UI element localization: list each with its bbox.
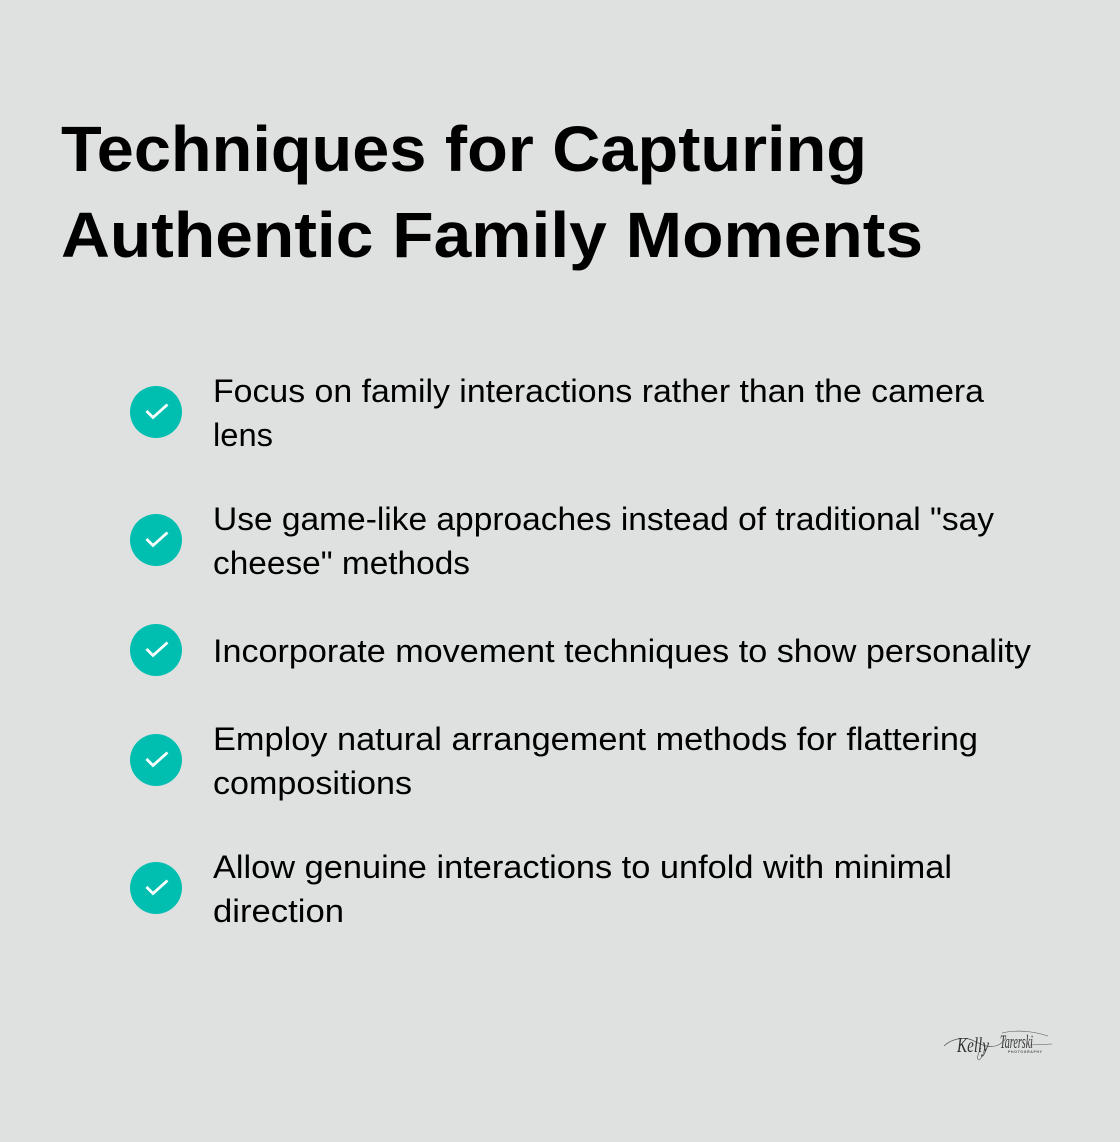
- item 3: Incorporate movement techniques to show personality: [213, 633, 1031, 669]
- item 1: Focus on family interactions rather than the camera: [213, 373, 984, 409]
- title: [61, 113, 923, 271]
- item 5: Allow genuine interactions to unfold with minimal: [213, 849, 952, 885]
- item 5: [130, 849, 952, 929]
- item 2: [130, 501, 994, 581]
- item 1: [130, 373, 984, 453]
- checklist: [130, 373, 1031, 929]
- item 4: [130, 721, 978, 801]
- item 2: cheese" methods: [213, 545, 470, 581]
- logo: signature: Kelly: [956, 1033, 989, 1057]
- logo: signature: [944, 1031, 1052, 1060]
- item 5: direction: [213, 893, 344, 929]
- item 4: Employ natural arrangement methods for flattering: [213, 721, 978, 757]
- logo: signature: PHOTOGRAPHY: [1008, 1050, 1043, 1054]
- title: Authentic Family Moments: [61, 199, 923, 271]
- item 1: lens: [213, 417, 273, 453]
- item 3: [130, 624, 1031, 676]
- item 2: Use game-like approaches instead of traditional "say: [213, 501, 994, 537]
- logo: signature: Tarerski: [1000, 1032, 1033, 1053]
- title: Techniques for Capturing: [61, 113, 867, 185]
- item 4: compositions: [213, 765, 412, 801]
